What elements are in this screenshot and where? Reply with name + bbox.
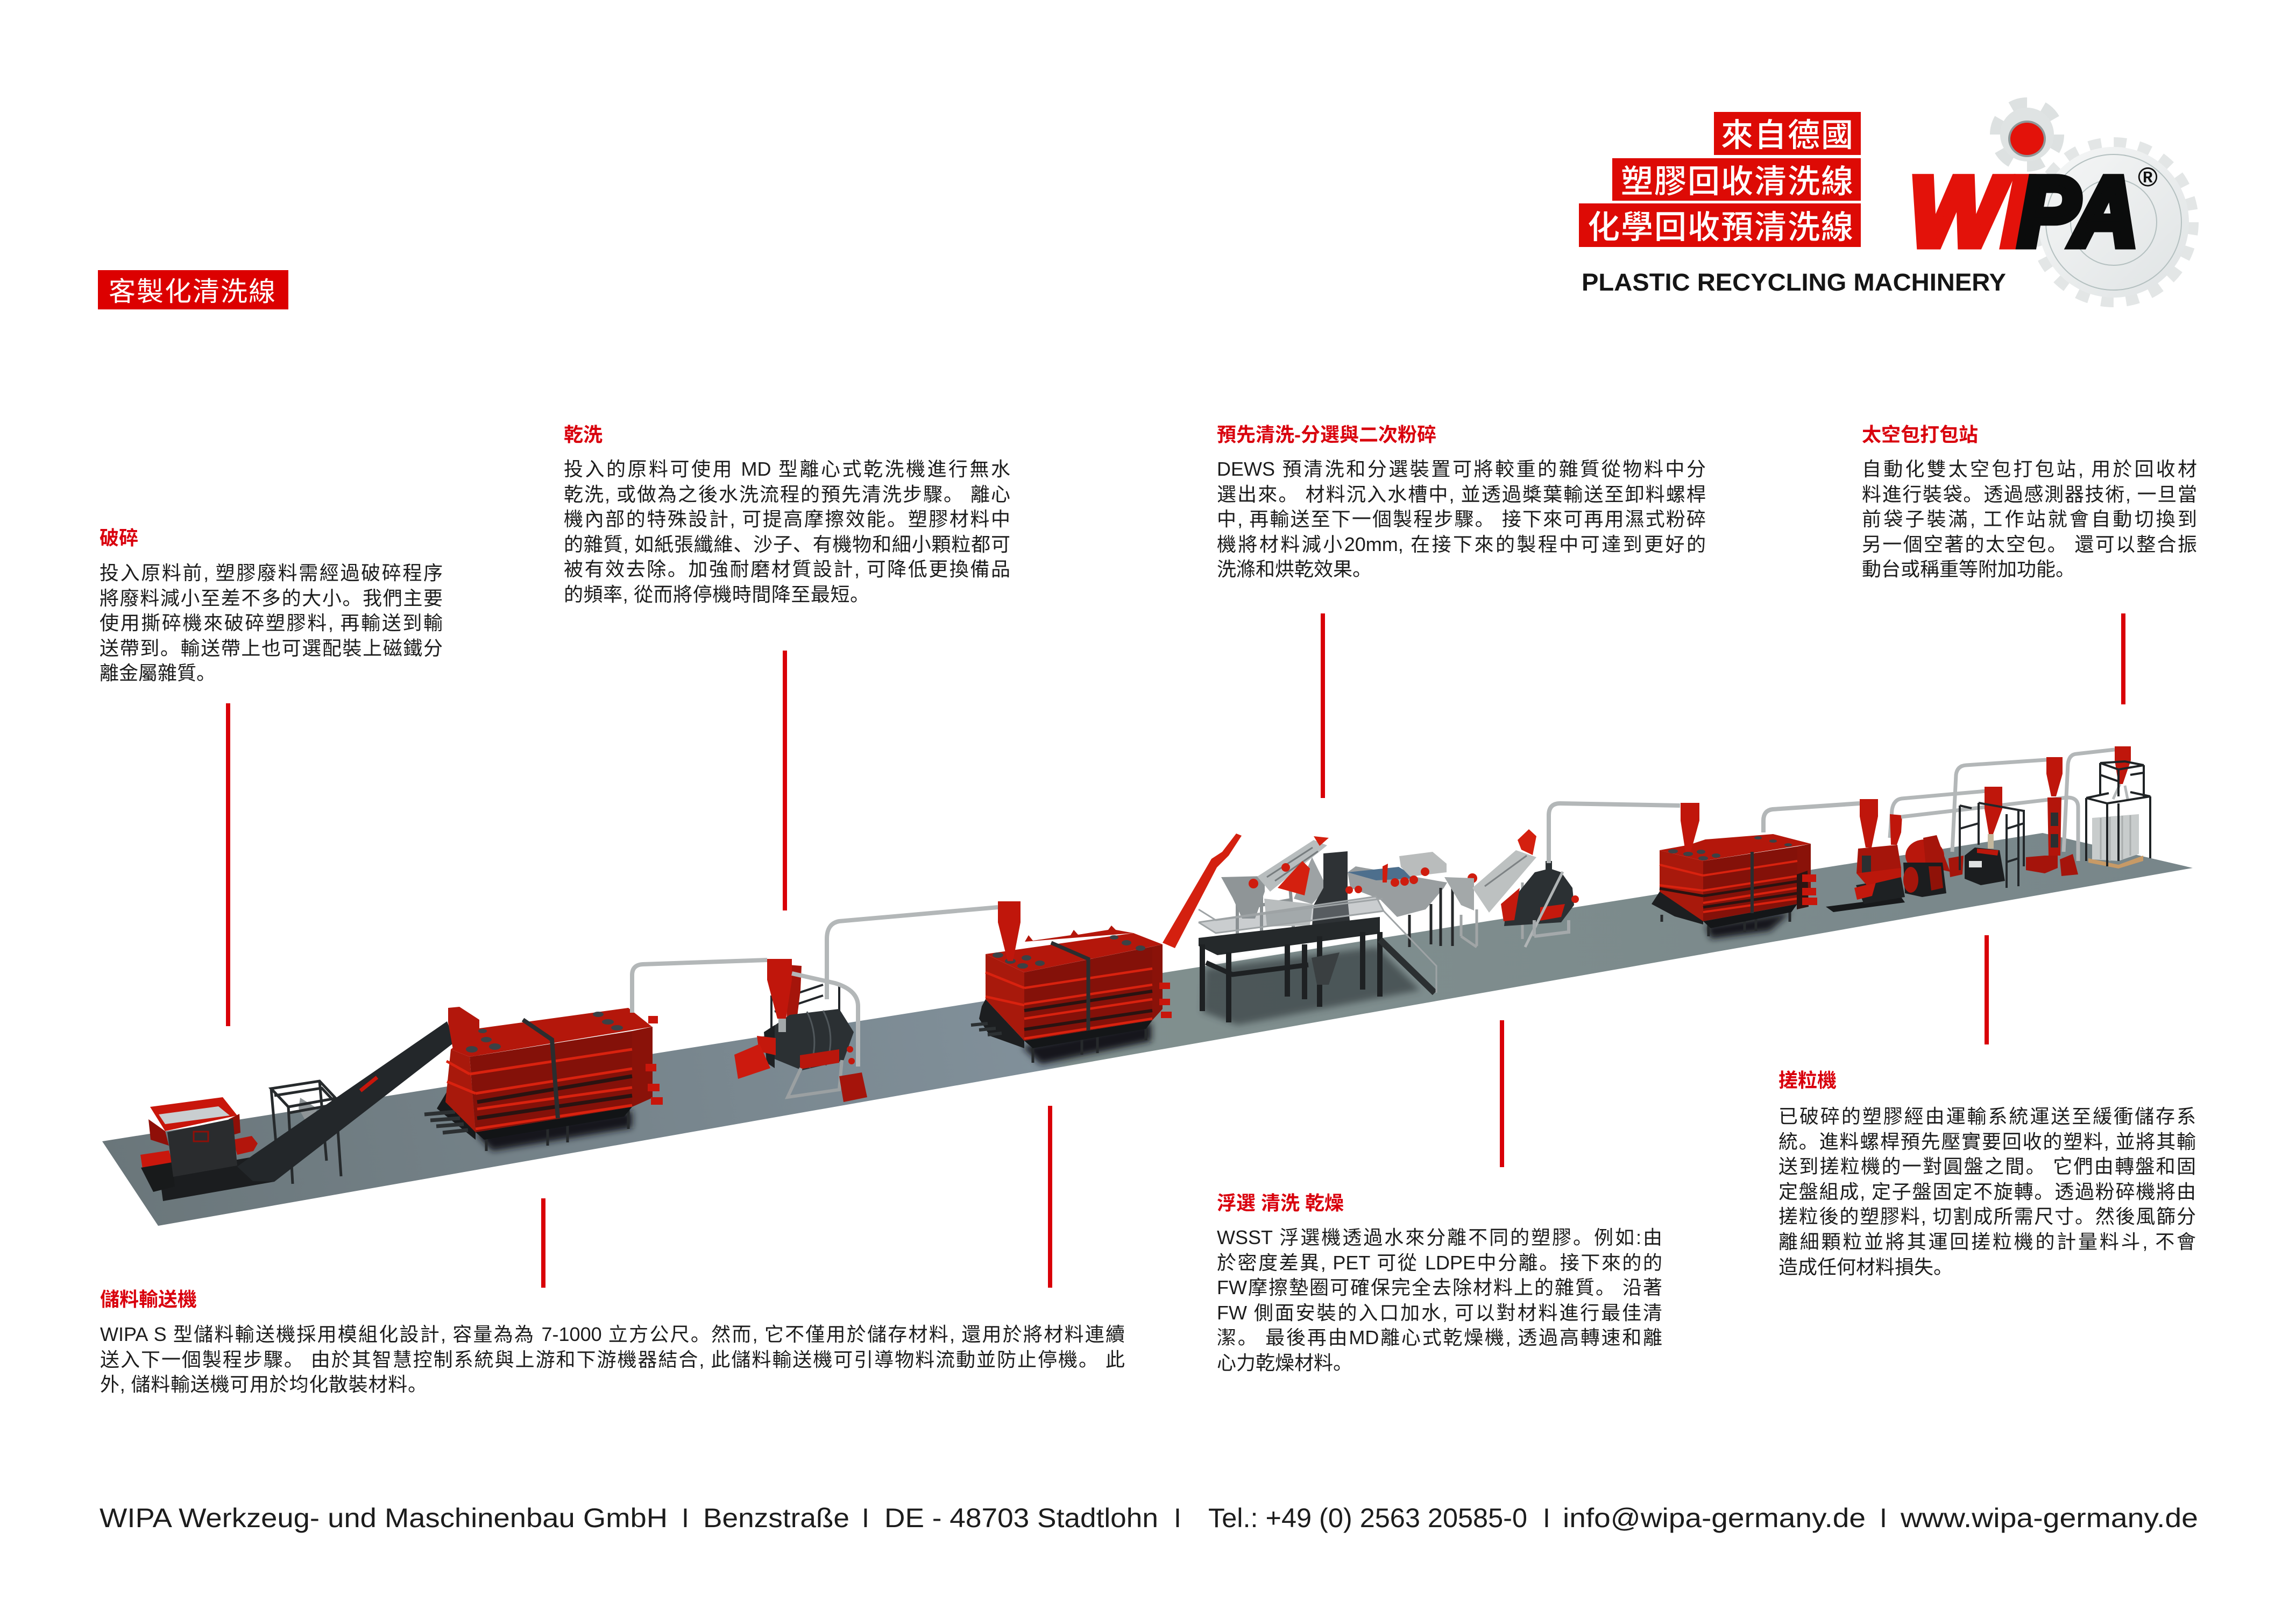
text: shredding: 使用撕碎機來破碎塑膠料, 再輸送到輸 <box>100 612 443 634</box>
logo tagline: PLASTIC RECYCLING MACHINERY <box>1582 269 2006 296</box>
logo: small gear with red hub <box>1997 104 2057 165</box>
text: pre-wash: 機將材料減小20mm, 在接下來的製程中可達到更好的 <box>1217 533 1706 555</box>
text: dry cleaning: 的雜質, 如紙張纖維、沙子、有機物和細小顆粒都可 <box>564 533 1010 555</box>
pipe: rear feed <box>1952 760 2046 852</box>
text: float wash dry: 心力乾燥材料。 <box>1217 1352 1352 1374</box>
text: float wash dry: 於密度差異, PET 可從 LDPE中分離。接下來的的 <box>1217 1252 1662 1274</box>
slogan box: from Germany: 來自德國 <box>1721 117 1854 153</box>
machine: DEWS pre-wash and sorting platform <box>1199 836 1477 1025</box>
leader line: storage conveyor 2 <box>1048 1106 1052 1288</box>
text: pre-wash: DEWS 預清洗和分選裝置可將較重的雜質從物料中分 <box>1217 458 1706 480</box>
machine: dry cleaner MD <box>734 959 867 1102</box>
text: pelletizer: 定盤組成, 定子盤固定不旋轉。透過粉碎機將由 <box>1778 1181 2196 1203</box>
text: shredding <box>100 562 443 684</box>
machine: granulator and frame <box>1960 787 2024 888</box>
heading: storage conveyor: 儲料輸送機 <box>100 1288 197 1310</box>
heading: pelletizer: 搓粒機 <box>1778 1069 1837 1091</box>
machine: pelletizer <box>1826 799 1964 912</box>
leader line: dry cleaning <box>783 651 787 910</box>
footer: contact line: I <box>862 1503 869 1533</box>
heading: shredding: 破碎 <box>100 527 138 549</box>
heading: pre-wash, sorting, secondary grinding: 預先清洗-分選與二次粉碎 <box>1217 423 1436 446</box>
footer: contact line: I <box>1880 1503 1887 1533</box>
logo: large gear <box>2035 143 2193 301</box>
text: big bag station: 自動化雙太空包打包站, 用於回收材 <box>1862 458 2197 480</box>
heading: float wash dry: 浮選 清洗 乾燥 <box>1217 1192 1344 1214</box>
heading: big bag station: 太空包打包站 <box>1862 423 1978 446</box>
text: storage conveyor <box>100 1323 1125 1395</box>
text: big bag station: 動台或稱重等附加功能。 <box>1862 558 2075 580</box>
footer: contact line: WIPA Werkzeug- und Maschinenbau GmbH <box>100 1503 668 1533</box>
leader line: pelletizer <box>1985 935 1989 1044</box>
machine: storage silo 2 <box>971 901 1172 1064</box>
leader line: big bag station <box>2121 613 2125 704</box>
pipe: drum return <box>792 973 858 1067</box>
leader line: pre-wash <box>1321 613 1325 798</box>
machine: storage silo 3 <box>1652 803 1817 939</box>
footer: contact line: info@wipa-germany.de <box>1563 1503 1866 1533</box>
text: float wash dry: FW 側面安裝的入口加水, 可以對材料進行最佳清 <box>1217 1302 1662 1324</box>
pipe: dry cleaner to silo 2 <box>827 907 998 999</box>
footer: contact line <box>100 1503 2198 1533</box>
text: float wash dry: FW摩擦墊圈可確保完全去除材料上的雜質。 沿著 <box>1217 1276 1662 1298</box>
text: pelletizer <box>1778 1105 2196 1278</box>
title tag: customized washing line <box>98 270 288 309</box>
text: pelletizer: 統。進料螺桿預先壓實要回收的塑料, 並將其輸 <box>1778 1131 2196 1153</box>
text: pre-wash <box>1217 458 1706 580</box>
machine: big bag station <box>2086 746 2150 869</box>
footer: contact line: I <box>1174 1503 1181 1533</box>
footer: contact line: Tel.: +49 (0) 2563 20585-0 <box>1208 1503 1527 1533</box>
machine: inclined red screw feeder <box>1163 834 1242 948</box>
pipe: silo 3 to pelletizer buffer <box>1763 803 1860 832</box>
text: pre-wash: 中, 再輸送至下一個製程步驟。 接下來可再用濕式粉碎 <box>1217 508 1706 530</box>
text: pelletizer: 離細顆粒並將其運回搓粒機的計量料斗, 不會 <box>1778 1231 2196 1253</box>
text: big bag station: 另一個空著的太空包。 還可以整合振 <box>1862 533 2197 555</box>
footer: contact line: www.wipa-germany.de <box>1900 1503 2198 1533</box>
text: pelletizer: 造成任何材料損失。 <box>1778 1256 1953 1278</box>
text: big bag station: 前袋子裝滿, 工作站就會自動切換到 <box>1862 508 2197 530</box>
text: storage conveyor: WIPA S 型儲料輸送機採用模組化設計, 容量為為 7-1000 立方公尺。然而, 它不僅用於儲存材料, 還用於將材料連續 <box>100 1323 1125 1345</box>
text: float wash dry <box>1217 1226 1662 1374</box>
text: dry cleaning: 投入的原料可使用 MD 型離心式乾洗機進行無水 <box>564 458 1010 480</box>
text: dry cleaning: 乾洗, 或做為之後水洗流程的預先清洗步驟。 離心 <box>564 483 1010 505</box>
text: pelletizer: 已破碎的塑膠經由運輸系統運送至緩衝儲存系 <box>1778 1105 2196 1127</box>
text: pre-wash: 選出來。 材料沉入水槽中, 並透過槳葉輸送至卸料螺桿 <box>1217 483 1706 505</box>
footer: contact line: I <box>1543 1503 1550 1533</box>
footer: contact line: I <box>682 1503 689 1533</box>
logo wordmark: WI: WI <box>1909 157 2031 266</box>
leader line: storage conveyor <box>541 1198 545 1288</box>
machine: storage silo 1 <box>424 1007 663 1151</box>
text: shredding: 將廢料減小至差不多的大小。我們主要 <box>100 587 443 609</box>
pipe: buffer to separator <box>1890 791 1986 838</box>
text: dry cleaning: 被有效去除。加強耐磨材質設計, 可降低更換備品 <box>564 558 1010 580</box>
pipe: silo 1 to dry cleaner <box>632 960 767 1013</box>
footer: contact line: DE - 48703 Stadtlohn <box>884 1503 1158 1533</box>
text: storage conveyor: 送入下一個製程步驟。 由於其智慧控制系統與上游和下游機器結合, 此儲料輸送機可引導物料流動並防止停機。 此 <box>100 1348 1125 1371</box>
title tag: customized washing line: 客製化清洗線 <box>109 277 277 307</box>
text: shredding: 送帶到。輸送帶上也可選配裝上磁鐵分 <box>100 637 443 659</box>
logo: WIPA gears <box>1997 104 2193 301</box>
text: pelletizer: 搓粒後的塑膠料, 切割成所需尺寸。然後風篩分 <box>1778 1205 2196 1227</box>
text: dry cleaning: 機內部的特殊設計, 可提高摩擦效能。塑膠材料中 <box>564 508 1010 530</box>
pipe: pelletizer overhead <box>1901 797 2078 861</box>
text: shredding: 離金屬雜質。 <box>100 662 216 684</box>
machine: washer and second screw <box>1444 829 1579 947</box>
text: storage conveyor: 外, 儲料輸送機可用於均化散裝材料。 <box>100 1373 427 1395</box>
text: pelletizer: 送到搓粒機的一對圓盤之間。 它們由轉盤和固 <box>1778 1155 2196 1177</box>
leader line: shredding <box>226 703 230 1026</box>
machine: separator column <box>2026 757 2078 876</box>
text: dry cleaning: 的頻率, 從而將停機時間降至最短。 <box>564 583 869 605</box>
text: big bag station <box>1862 458 2197 580</box>
text: float wash dry: 潔。 最後再由MD離心式乾燥機, 透過高轉速和離 <box>1217 1326 1662 1348</box>
logo wordmark: PA: PA <box>2018 157 2138 266</box>
logo: registered mark: ® <box>2138 162 2158 192</box>
floor: factory ground plane <box>102 833 2193 1226</box>
text: float wash dry: WSST 浮選機透過水來分離不同的塑膠。例如:由 <box>1217 1226 1662 1248</box>
slogan box: chemical recycling pre-wash line: 化學回收預清洗線 <box>1588 209 1854 245</box>
leader line: float wash dry <box>1500 1020 1504 1167</box>
pipe: to big bag cyclone <box>2064 750 2115 852</box>
machine: support tower frame <box>271 1081 341 1184</box>
text: pre-wash: 洗滌和烘乾效果。 <box>1217 558 1372 580</box>
slogan box: plastic recycling washing line: 塑膠回收清洗線 <box>1621 164 1854 200</box>
heading: dry cleaning: 乾洗 <box>564 423 603 446</box>
footer: contact line: Benzstraße <box>703 1503 849 1533</box>
pipe: washer to silo 3 <box>1549 803 1680 863</box>
text: shredding: 投入原料前, 塑膠廢料需經過破碎程序 <box>100 562 443 584</box>
text: big bag station: 料進行裝袋。透過感測器技術, 一旦當 <box>1862 483 2197 505</box>
text: dry cleaning <box>564 458 1010 605</box>
machine: shredder <box>140 1097 274 1201</box>
machine: inclined storage conveyor <box>237 1021 455 1182</box>
